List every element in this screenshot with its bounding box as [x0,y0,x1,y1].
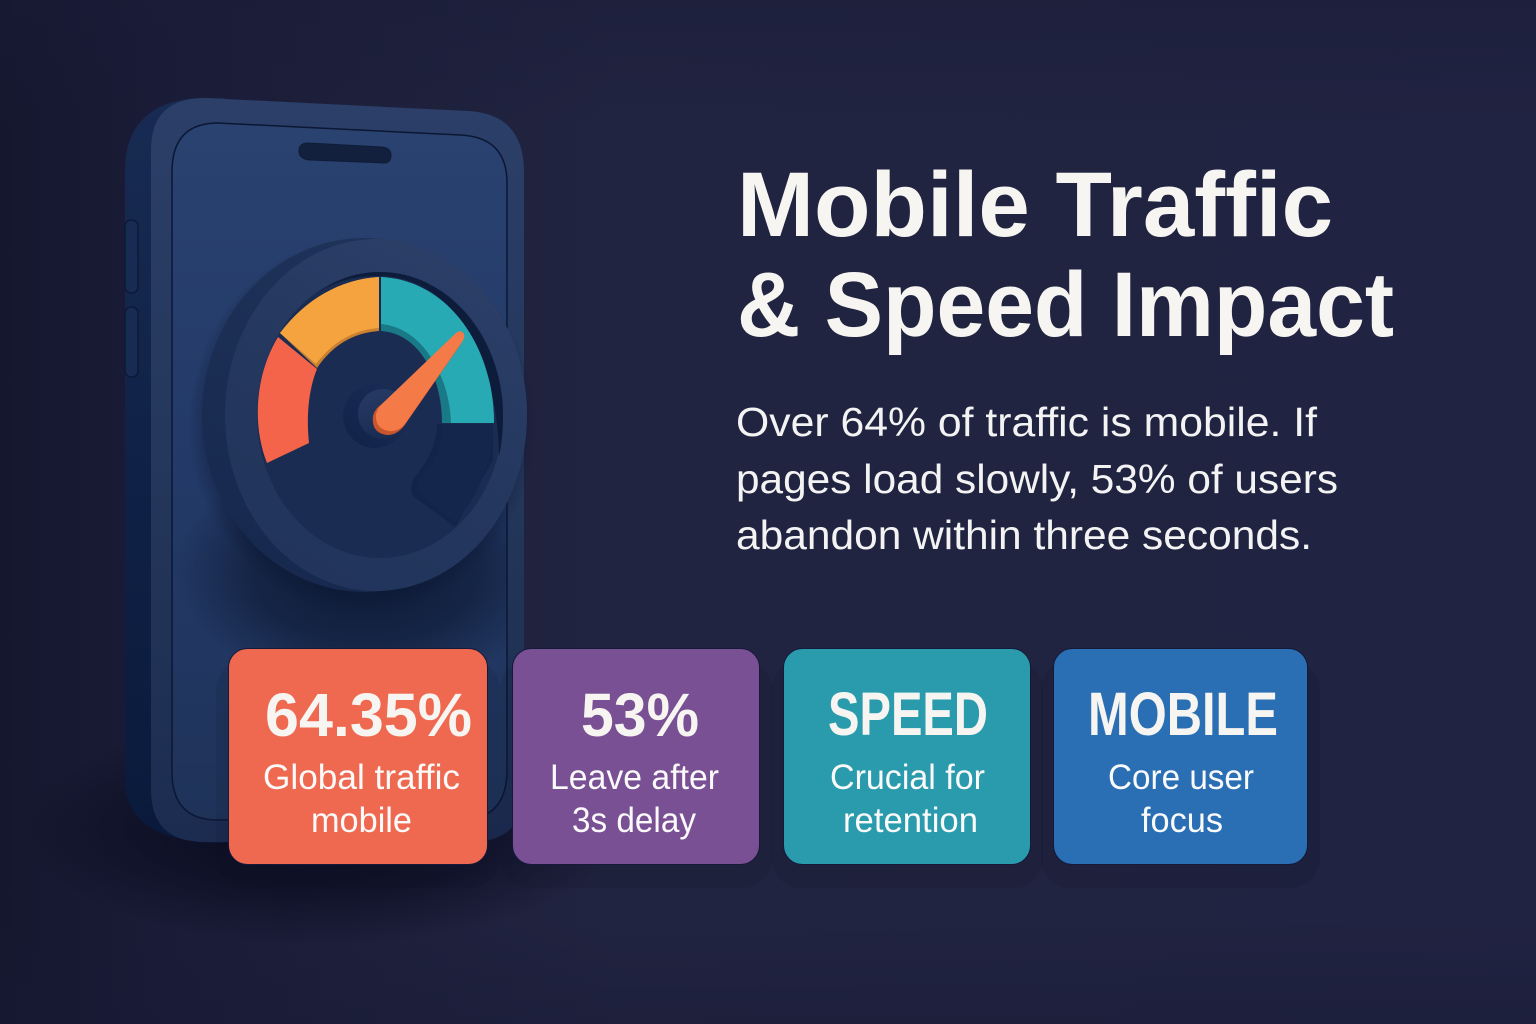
segment: orange lip [280,277,379,368]
stat label: focus [1141,801,1223,840]
stat label: Crucial for [830,758,985,797]
phone and card ground shadow [20,715,620,945]
stat label: Global traffic [263,758,460,797]
card: mobile [1041,648,1320,888]
title [737,154,1394,356]
side button: upper [125,220,138,293]
stat label: retention [843,801,978,840]
segment: teal lip [381,277,494,423]
segment: dark [418,424,493,522]
stat value: 53% [581,681,699,749]
segment: orange [280,277,379,364]
stat value: 64.35% [265,681,472,749]
description line 1: Over 64% of traffic is mobile. If [736,399,1318,445]
card background [228,648,488,864]
description line 2: pages load slowly, 53% of users [736,456,1338,502]
gauge dial [257,272,503,558]
card soft shadow [1041,660,1320,888]
description line 3: abandon within three seconds. [736,512,1312,558]
speaker notch [299,143,391,163]
title line 1: Mobile Traffic [737,154,1333,256]
card: abandonment [500,648,772,888]
stat label [830,758,985,840]
phone side wall [125,98,225,843]
gauge ring shadow [188,237,536,613]
card: global traffic [216,648,500,888]
gauge ring side [202,238,527,592]
segment: red [258,337,317,463]
stat label [550,758,719,840]
card background [512,648,760,864]
stat label [1108,758,1254,840]
gauge cast shadow on screen [196,513,506,649]
gauge ring face [225,239,527,591]
side button: lower [125,307,138,377]
stat value: SPEED [828,680,988,748]
dial top crescent shadow [300,272,503,456]
phone screen [172,123,507,820]
needle hub [343,384,408,448]
phone front bezel [151,98,524,842]
stat label [263,758,460,840]
needle [376,331,464,431]
speedometer gauge [188,237,536,613]
stat label: Core user [1108,758,1254,797]
card background [784,648,1030,864]
stat label: mobile [311,801,412,840]
card: speed [771,648,1043,888]
stat label: 3s delay [572,801,696,840]
needle lip [373,335,461,435]
stat label: Leave after [550,758,719,797]
card background [1054,648,1308,864]
segment: dark halo [411,424,493,527]
card soft shadow [500,660,772,888]
stat value: MOBILE [1088,680,1278,748]
title line 2: & Speed Impact [737,254,1394,356]
card soft shadow [216,660,500,888]
description [736,399,1338,558]
card soft shadow [771,660,1043,888]
segment: teal [381,277,494,423]
phone illustration [125,98,555,843]
